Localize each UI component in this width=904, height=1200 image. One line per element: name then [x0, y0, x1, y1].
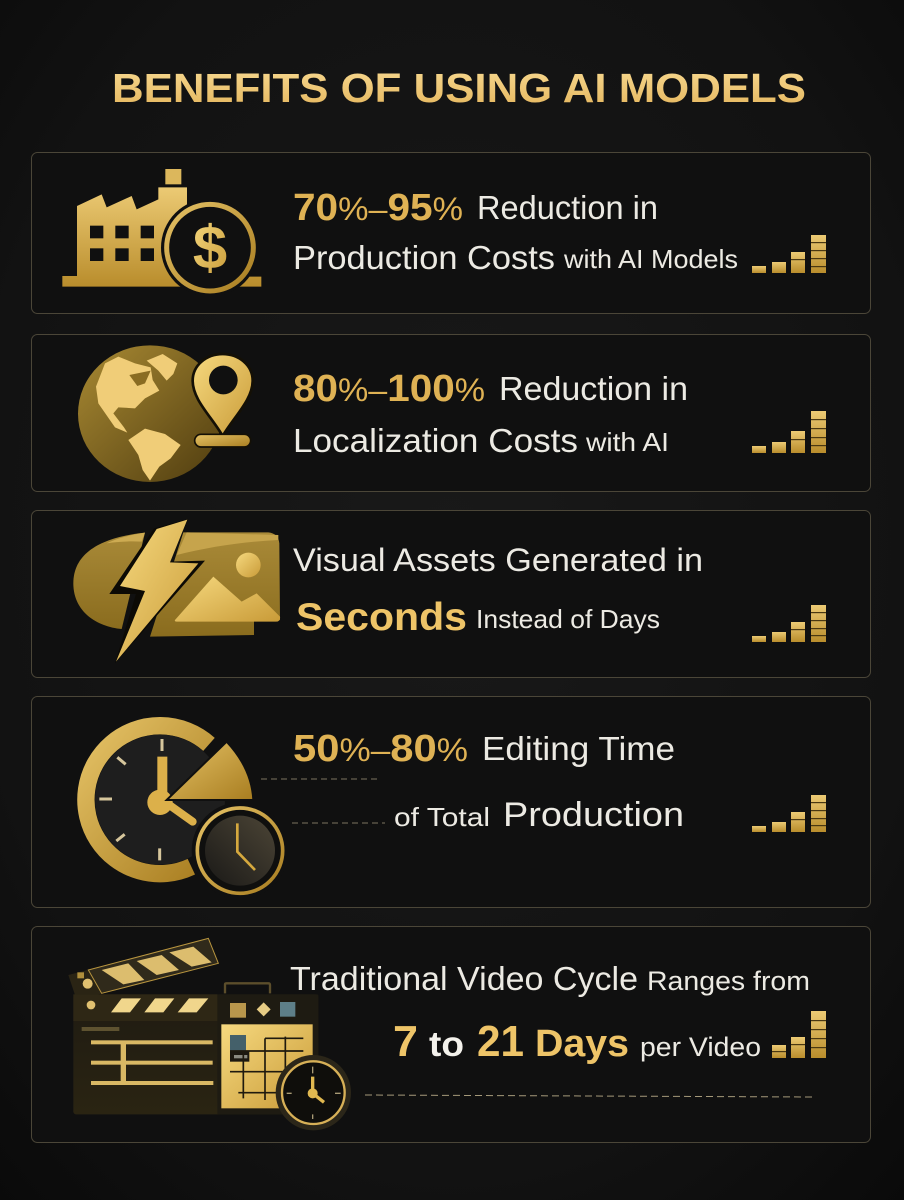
- icon: globe with location pin: [78, 345, 253, 482]
- text: with AI: with AI: [585, 427, 669, 457]
- text: days: Days: [535, 1023, 629, 1065]
- text: traditional video cycle: Traditional Video Cycle: [290, 960, 638, 997]
- text: seconds: Seconds: [296, 596, 467, 639]
- text: localization costs: Localization Costs: [293, 422, 578, 459]
- panel: production costs: [32, 152, 870, 314]
- text: reduction in: Reduction in: [499, 370, 688, 407]
- text: to: to: [429, 1025, 464, 1064]
- text: 7: 7: [393, 1017, 418, 1066]
- panel: editing time: [32, 696, 870, 908]
- icon: signal bars: [772, 1011, 826, 1058]
- text: editing time: Editing Time: [482, 730, 675, 767]
- text: 80%–100%: 80%–100%: [293, 368, 485, 410]
- icon: factory with dollar coin: [62, 169, 261, 297]
- text: per video: per Video: [640, 1032, 761, 1062]
- text: reduction in: Reduction in: [477, 189, 658, 226]
- panel: video cycle: [32, 926, 870, 1142]
- text: production costs: Production Costs: [293, 239, 555, 276]
- panel: visual assets: [32, 510, 870, 678]
- panel: localization costs: [32, 334, 870, 492]
- title: BENEFITS OF USING AI MODELS: [112, 65, 806, 111]
- text: 21: 21: [477, 1017, 524, 1066]
- text: 70%–95% reduction: 70%–95%: [293, 187, 463, 229]
- icon: factory with dollar coin: $: [193, 214, 227, 283]
- text: visual assets generated in: Visual Assets Generated in: [293, 542, 703, 578]
- icon: lightning bolt with image: [73, 519, 280, 663]
- icon: clapperboard with calendar and clock: [68, 938, 351, 1130]
- icon: signal bars: [752, 411, 826, 453]
- text: ranges from: Ranges from: [647, 966, 810, 996]
- icon: clocks with pie slice: [86, 726, 288, 899]
- icon: signal bars: [752, 795, 826, 832]
- icon: signal bars: [752, 235, 826, 273]
- text: with AI models: with AI Models: [563, 244, 738, 274]
- text: of total: of Total: [394, 802, 490, 832]
- text: production: Production: [503, 796, 684, 834]
- icon: signal bars: [752, 605, 826, 642]
- text: 50%–80%: 50%–80%: [293, 728, 468, 770]
- text: instead of days: Instead of Days: [476, 604, 660, 634]
